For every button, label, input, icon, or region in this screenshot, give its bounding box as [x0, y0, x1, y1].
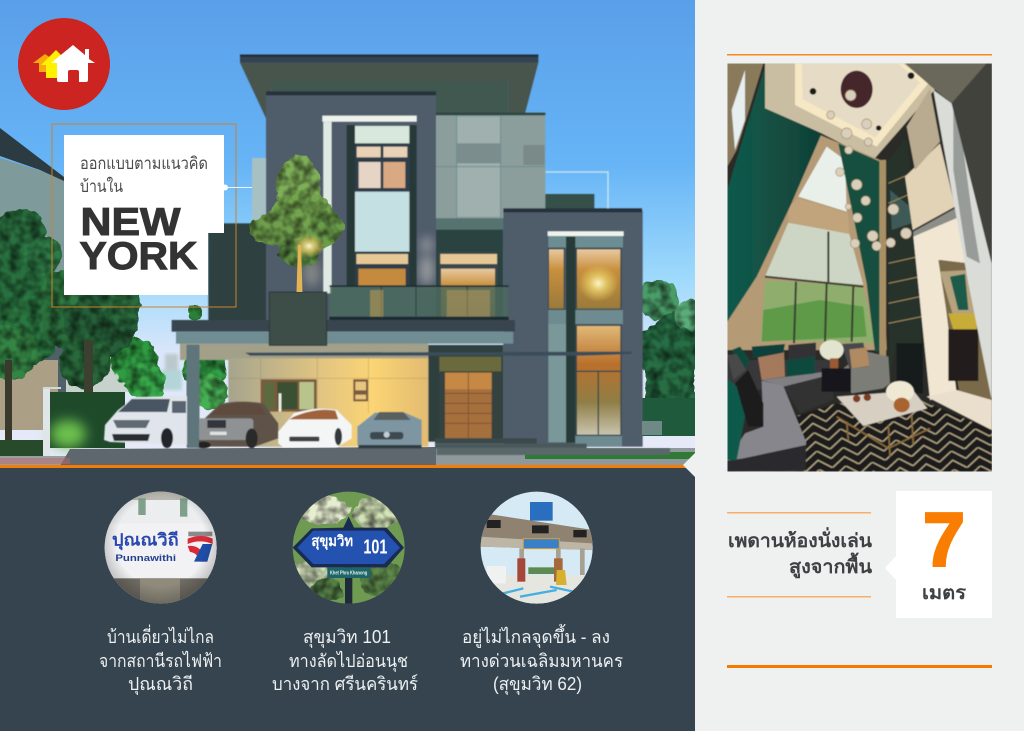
title subheading: ออกแบบตามแนวคิด — [80, 154, 208, 173]
text: near expressway access: (สุขุมวิท 62) — [493, 674, 582, 695]
back wall and windows — [727, 135, 887, 350]
ceiling spotlights — [810, 72, 914, 131]
grey sectional sofa — [727, 352, 890, 472]
unit: เมตร — [922, 583, 967, 604]
photo: Sukhumvit 101 street sign: Khet Phra Khanong — [330, 571, 367, 577]
caption line 2: สูงจากพื้น — [789, 552, 872, 579]
connector line from card to house — [222, 184, 252, 190]
sky — [0, 0, 695, 466]
title card: designed in New York concept — [52, 124, 252, 307]
flowers — [820, 340, 844, 360]
thin entrance canopy — [245, 352, 632, 356]
left curtain — [727, 67, 822, 322]
floor — [927, 390, 992, 430]
foreground trees on the left — [0, 209, 140, 388]
blue-grey roadster — [357, 412, 422, 448]
photo: expressway toll plaza — [480, 490, 595, 605]
notch pointer on panel edge — [683, 453, 695, 477]
cars under the carport — [196, 401, 422, 448]
rear upper volumes — [208, 223, 267, 320]
orange divider under hero image — [0, 465, 695, 468]
white sports car — [278, 409, 352, 447]
photo: Punnawithi station — [103, 490, 218, 605]
stone cladding — [436, 113, 545, 218]
big number 7: 7 — [923, 498, 965, 583]
text: Sukhumvit 101 shortcut: ทางลัดไปอ่อนนุช — [289, 650, 408, 672]
white van on the driveway — [104, 345, 199, 448]
carport soffit, wall and column — [180, 343, 428, 447]
upper wall, mirror and column — [905, 143, 955, 230]
brick tower wall — [266, 95, 436, 322]
entrance — [428, 345, 503, 442]
wall lights — [419, 255, 434, 285]
silver BMW — [196, 401, 278, 448]
hero illustration: house against sky — [0, 0, 712, 466]
hedge and gate post — [0, 387, 125, 456]
text: Sukhumvit 101 shortcut — [272, 627, 418, 694]
planter box — [269, 292, 327, 345]
text: near Punnawithi BTS station — [99, 624, 222, 695]
title subheading line 2: บ้านใน — [80, 176, 123, 196]
background trees on the right — [642, 280, 695, 398]
photo: Punnawithi station: ปุณณวิถี — [112, 530, 179, 550]
lattice screen — [886, 137, 922, 377]
text: Sukhumvit 101 shortcut: สุขุมวิท 101 — [303, 627, 391, 648]
facade tree — [250, 155, 343, 292]
text: near expressway access: อยู่ไม่ไกลจุดขึ้น - ลง — [462, 624, 610, 648]
ground and driveway — [0, 447, 695, 466]
hanging chandelier — [827, 90, 911, 251]
black cabinet — [897, 343, 923, 393]
hedge on the right — [642, 398, 695, 436]
callout: ceiling height caption — [727, 512, 872, 598]
text: near Punnawithi BTS station: จากสถานีรถไฟฟ้า — [99, 650, 222, 671]
distant city and background trees — [160, 352, 184, 392]
small car at far right — [642, 421, 662, 435]
steps — [435, 438, 670, 455]
right side panel background — [695, 0, 1024, 731]
callout card: 7 metres — [885, 491, 992, 618]
title: YORK: YORK — [80, 235, 198, 278]
slab and fascia — [172, 320, 515, 344]
brand logo badge — [18, 18, 110, 110]
top orange rule on right panel — [727, 54, 992, 56]
text: near Punnawithi BTS station: ปุณณวิถี — [128, 674, 193, 695]
marble coffee table — [837, 391, 927, 426]
neighbouring house on the left — [0, 128, 132, 430]
balcony glass railing — [329, 285, 509, 320]
cushions — [757, 352, 785, 380]
tree trunks — [5, 340, 93, 440]
roof — [240, 55, 538, 118]
right curtain — [838, 143, 883, 352]
patterned rug — [795, 400, 992, 472]
ceiling — [765, 63, 935, 160]
photo: Sukhumvit 101 street sign: สุขุมวิท — [311, 533, 353, 550]
text: near Punnawithi BTS station: บ้านเดี่ยวไม่ไกล — [107, 624, 214, 647]
background tree clusters — [111, 304, 228, 410]
icon: three houses — [33, 45, 95, 82]
photo: Sukhumvit 101 street sign — [290, 490, 407, 605]
text: near expressway access: ทางด่วนเฉลิมมหานคร — [460, 651, 623, 671]
photo: Punnawithi station: Punnawithi — [115, 553, 176, 563]
photo: double-height living room interior — [727, 63, 992, 472]
text: Sukhumvit 101 shortcut: บางจาก ศรีนครินทร์ — [272, 674, 418, 694]
photo: Sukhumvit 101 street sign: 101 — [363, 535, 387, 558]
window column — [322, 116, 417, 293]
caption line 1: เพดานห้องนั่งเล่น — [728, 527, 872, 552]
bottom orange rule on right panel — [727, 665, 992, 668]
dark location panel — [0, 468, 695, 731]
recessed wall with balcony window — [436, 218, 503, 320]
title: NEW: NEW — [80, 201, 181, 244]
main house drawn in zoomed coordinates — [172, 55, 670, 455]
right block — [503, 208, 643, 447]
text: near expressway access — [460, 624, 623, 695]
icon: BTS logo — [188, 532, 213, 562]
